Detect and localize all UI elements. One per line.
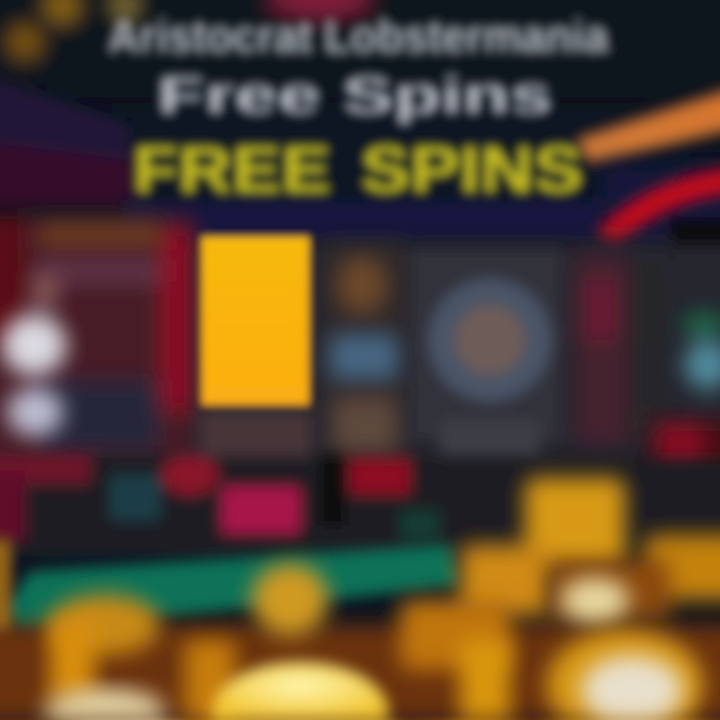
title: Free Spins [158, 67, 552, 125]
panel: below yellow [200, 412, 312, 472]
heading: free spins: FREE [133, 132, 331, 206]
figure in white [2, 272, 66, 436]
panel: red column [575, 255, 663, 445]
right streaks [575, 80, 720, 302]
lower row [0, 455, 720, 550]
bottom edge underlay [0, 696, 720, 720]
panel: yellow [202, 237, 309, 405]
gold coins [0, 478, 720, 720]
heading: free spins: SPINS [361, 132, 583, 206]
red arc [605, 178, 720, 240]
panel: dial [412, 250, 562, 460]
heading: free spins [133, 132, 583, 206]
navy band [125, 200, 605, 242]
top background glow [0, 0, 720, 90]
orange stripe [575, 80, 720, 163]
right side dark backdrop [600, 165, 720, 255]
panel: left maroon [0, 215, 195, 460]
black corner [672, 222, 720, 302]
right edge details [650, 313, 720, 520]
title: Aristocrat Lobstermania [108, 10, 608, 62]
green table [5, 545, 460, 632]
panel: centre column [325, 245, 405, 475]
left purple wedge [0, 70, 135, 205]
title [108, 10, 608, 125]
casino wall [0, 240, 720, 550]
